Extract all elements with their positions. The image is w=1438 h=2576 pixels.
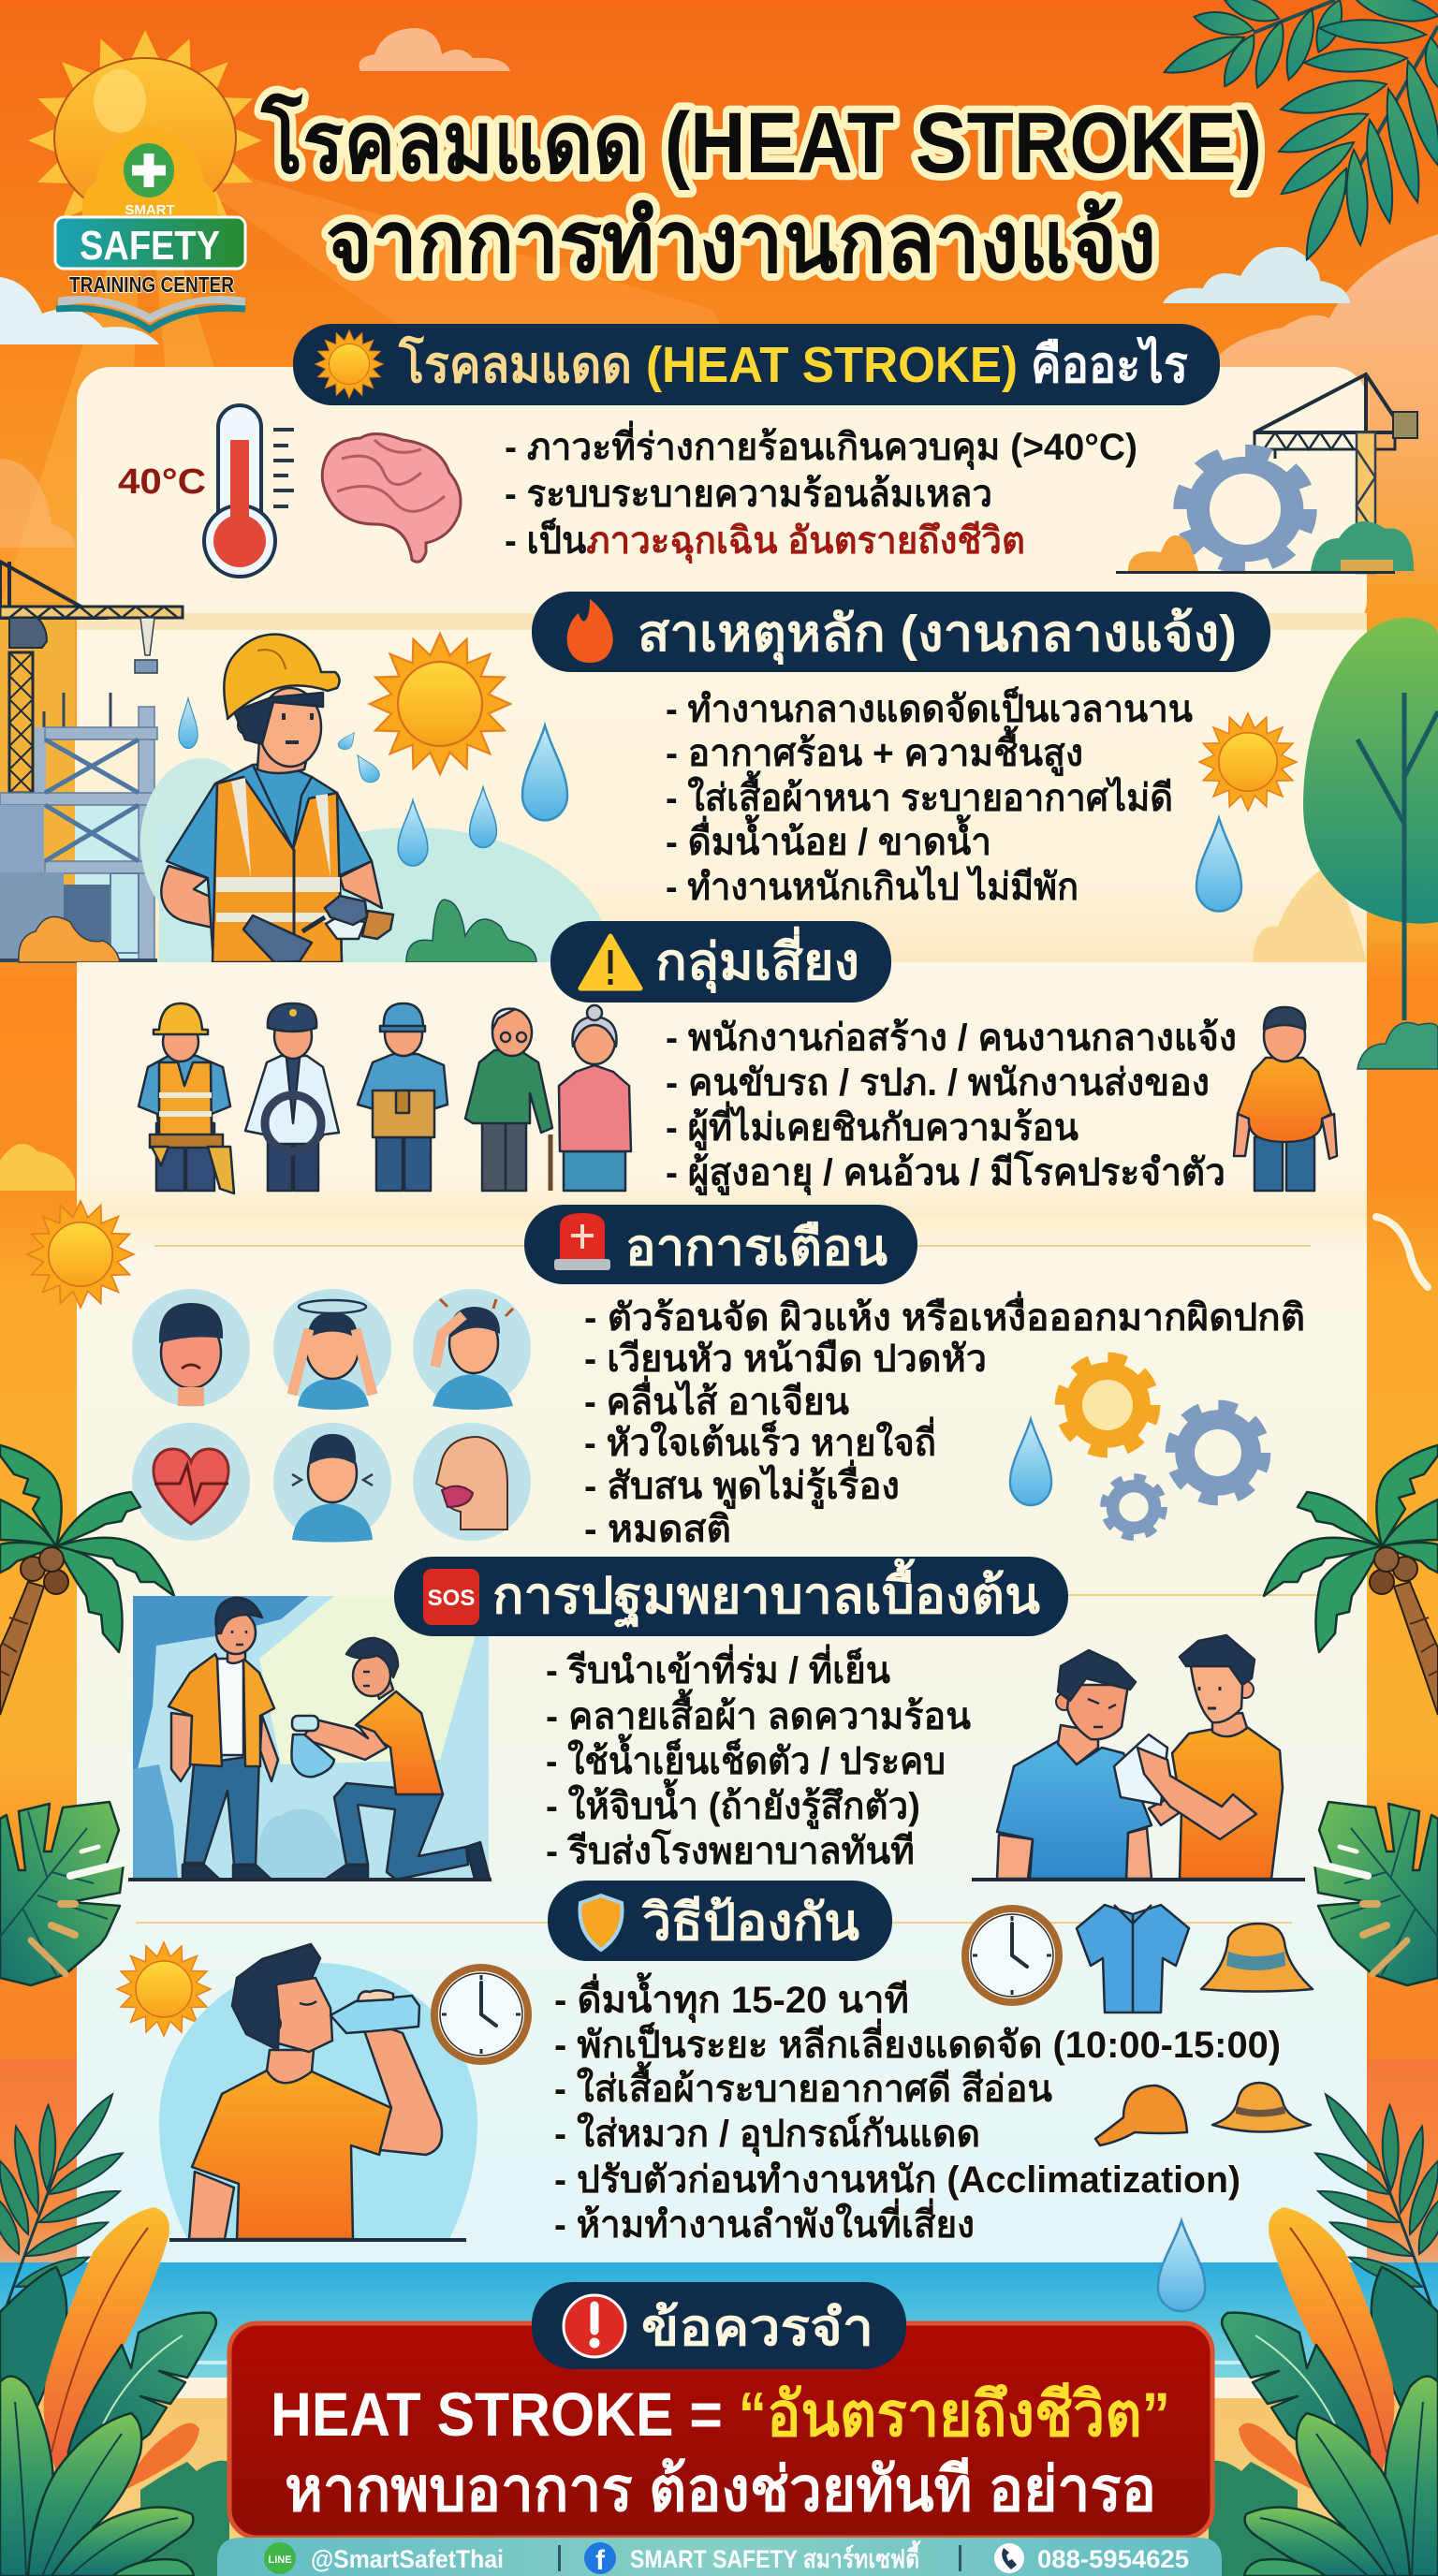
text: warning signs [584, 1291, 1305, 1550]
text: main causes: - ดื่มน้ำน้อย / ขาดน้ำ [666, 814, 991, 863]
icon: sun beside worker [370, 634, 510, 774]
text: callout: HEAT STROKE = “อันตรายถึงชีวิต” [271, 2379, 1170, 2449]
heading: first aid [394, 1557, 1068, 1636]
heading: prevention: วิธีป้องกัน [641, 1895, 859, 1951]
heading: remember: ข้อควรจำ [641, 2300, 873, 2356]
text: prevention: - ดื่มน้ำทุก 15-20 นาที [554, 1972, 909, 2024]
text: risk groups [666, 1017, 1237, 1196]
icon: line: LINE [268, 2554, 292, 2566]
person: orange shirt man [1172, 1727, 1283, 1879]
thermometer icon with 40 degrees [118, 405, 294, 577]
icon: sun right [1199, 713, 1297, 811]
icon: clock beside man [434, 1968, 528, 2061]
logo [28, 30, 262, 329]
title [260, 93, 1262, 290]
icon: brain [322, 433, 461, 562]
text: first aid: - คลายเสื้อผ้า ลดความร้อน [546, 1689, 971, 1737]
text: main causes: - อากาศร้อน + ความชื้นสูง [666, 725, 1083, 776]
text: main causes [666, 685, 1193, 908]
heading: remember [532, 2282, 906, 2369]
text: main causes: - ทำงานหนักเกินไป ไม่มีพัก [666, 865, 1078, 908]
text: callout: หากพบอาการ ต้องช่วยทันที อย่ารอ [285, 2454, 1156, 2524]
icon: sun hat large [1201, 1924, 1313, 1992]
icon: green bush [406, 900, 536, 962]
text: risk groups: - พนักงานก่อสร้าง / คนงานกลางแจ้ง [666, 1017, 1237, 1059]
heading: risk groups [550, 921, 891, 1003]
splash decoration right [1376, 1217, 1428, 1287]
palm branch: top right [1160, 0, 1438, 264]
text: first aid: - รีบนำเข้าที่ร่ม / ที่เย็น [546, 1644, 890, 1691]
text: prevention: - ใส่หมวก / อุปกรณ์กันแดด [554, 2112, 980, 2158]
text: first aid: - รีบส่งโรงพยาบาลทันที [546, 1829, 915, 1872]
panel: first aid [77, 1595, 1367, 1885]
first aid scene: right [972, 1635, 1305, 1881]
heading: what is heat stroke: (HEAT STROKE) [646, 337, 1018, 393]
icons: symptom circles [132, 1289, 531, 1543]
symptom: hot face [132, 1289, 250, 1407]
icon: sun prevention [117, 1942, 211, 2036]
icon: flame [567, 599, 613, 663]
panel: risk groups [77, 962, 1367, 1220]
tree right [1253, 618, 1438, 1020]
text: warning signs: - หัวใจเต้นเร็ว หายใจถี่ [584, 1416, 936, 1464]
icon: warning triangle [580, 936, 640, 988]
icon: drop large [1158, 2220, 1205, 2311]
icon: shield [580, 1895, 623, 1950]
icons: gears and drop [1010, 1360, 1263, 1536]
heading: risk groups: กลุ่มเสี่ยง [655, 926, 859, 994]
title: จากการทำงานกลางแจ้ง [326, 195, 1156, 290]
symptom: fast breathing [273, 1423, 391, 1543]
icon: sos: SOS [428, 1586, 475, 1611]
panel: main causes [77, 630, 1367, 964]
palm tree: right [1264, 1445, 1438, 1715]
cloud: right [1163, 247, 1350, 303]
worker illustration [161, 635, 393, 962]
person: standing man [171, 1713, 278, 1781]
logo: SMART [125, 202, 175, 218]
person: construction worker [139, 1003, 234, 1193]
icon: sun [315, 330, 383, 398]
text: warning signs: - หมดสติ [584, 1509, 731, 1550]
text: what is heat stroke: - ภาวะที่ร่างกายร้อนเกินควบคุม (>40°C) [505, 420, 1137, 471]
text: callout [271, 2379, 1170, 2524]
icon: sun left [27, 1201, 134, 1308]
band between panels [77, 613, 1367, 630]
person: overweight man [1234, 1007, 1337, 1191]
crane and gear: top right [1116, 374, 1417, 574]
text: prevention: - ปรับตัวก่อนทำงานหนัก (Acclimatization) [554, 2159, 1240, 2201]
cloud: top centre [359, 28, 510, 71]
heading: what is heat stroke: โรคลมแดด [398, 335, 632, 393]
text: risk groups: - ผู้ที่ไม่เคยชินกับความร้อน [666, 1101, 1078, 1150]
title: โรคลมแดด (HEAT STROKE) [260, 93, 1262, 191]
icon: cap [1095, 2086, 1187, 2145]
monstera leaf: left [0, 1802, 124, 1985]
text: warning signs: - เวียนหัว หน้ามืด ปวดหัว [584, 1339, 987, 1380]
heading: first aid: การปฐมพยาบาลเบื้องต้น [492, 1559, 1040, 1629]
text: first aid [546, 1644, 971, 1872]
icon: line [264, 2542, 296, 2574]
text: prevention [554, 1972, 1281, 2246]
icon: sos [423, 1569, 479, 1625]
heading: main causes [532, 592, 1270, 672]
foliage: bottom left [0, 2089, 229, 2576]
icon: clock top right [965, 1909, 1059, 2002]
callout: remember [229, 2323, 1212, 2538]
logo: SAFETY [80, 223, 220, 269]
thermometer icon with 40 degrees: 40°C [118, 462, 206, 502]
text: what is heat stroke: - ระบบระบายความร้อนล้มเหลว [505, 474, 992, 515]
icon: facebook: f [595, 2545, 606, 2576]
crane and scaffold: left [0, 562, 183, 962]
person: delivery worker [358, 1003, 448, 1191]
text: risk groups: - ผู้สูงอายุ / คนอ้วน / มีโรคประจำตัว [666, 1150, 1225, 1196]
first aid scene: left [128, 1596, 492, 1881]
drinking man illustration [159, 1944, 477, 2242]
text: risk groups: - คนขับรถ / รปภ. / พนักงานส่งของ [666, 1062, 1210, 1104]
text: prevention: - ห้ามทำงานลำพังในที่เสี่ยง [554, 2198, 975, 2246]
text: warning signs: - สับสน พูดไม่รู้เรื่อง [584, 1459, 900, 1509]
footer bar: 088-5954625 [1037, 2545, 1189, 2573]
icon: orange bush [19, 916, 120, 962]
person: kneeling helper [334, 1783, 468, 1880]
people: risk groups [139, 1003, 1337, 1193]
symptom: vomiting [413, 1423, 531, 1541]
text: warning signs: - คลื่นไส้ อาเจียน [584, 1375, 849, 1423]
icon: bucket hat [1212, 2083, 1311, 2132]
panel: what is heat stroke [77, 367, 1367, 634]
foliage: bottom right [1209, 2089, 1438, 2576]
person: elderly woman [559, 1005, 631, 1191]
icon: drop right [1196, 818, 1241, 911]
icon: small bush right [1357, 1022, 1438, 1069]
heading: warning signs: อาการเตือน [625, 1220, 888, 1276]
text: first aid: - ใช้น้ำเย็นเช็ดตัว / ประคบ [546, 1734, 946, 1782]
heading: what is heat stroke [293, 324, 1220, 405]
divider: first aid [1067, 1594, 1339, 1596]
panel: warning signs [77, 1217, 1367, 1601]
icon: phone [994, 2543, 1024, 2573]
footer bar [217, 2538, 1222, 2576]
heading: what is heat stroke: คืออะไร [1031, 335, 1188, 393]
icon: shirt [1077, 1905, 1189, 2012]
hills behind worker [140, 758, 612, 1101]
footer bar: SMART SAFETY สมาร์ทเซฟตี้ [630, 2539, 921, 2573]
text: what is heat stroke: - เป็นภาวะฉุกเฉิน อันตรายถึงชีวิต [505, 517, 1025, 564]
text: main causes: - ทำงานกลางแดดจัดเป็นเวลานาน [666, 685, 1193, 730]
monstera leaf: right [1314, 1802, 1438, 1985]
symptom: dizzy [273, 1289, 391, 1410]
cloud: left [0, 277, 159, 344]
symptom: heart [132, 1423, 250, 1541]
symptom: headache [413, 1289, 531, 1410]
text: warning signs: - ตัวร้อนจัด ผิวแห้ง หรือเหงื่อออกมากผิดปกติ [584, 1291, 1305, 1339]
person: elderly man [465, 1009, 552, 1191]
heading: warning signs [524, 1205, 917, 1284]
text: prevention: - พักเป็นระยะ หลีกเลี่ยงแดดจัด (10:00-15:00) [554, 2018, 1281, 2066]
icon: facebook [584, 2542, 616, 2576]
icon: alarm light [554, 1213, 610, 1270]
text: what is heat stroke [505, 420, 1137, 564]
person: driver [245, 1003, 339, 1191]
footer bar: @SmartSafetThai [311, 2545, 504, 2573]
divider: prevention [136, 1922, 1292, 1924]
text: prevention: - ใส่เสื้อผ้าระบายอากาศดี สีอ่อน [554, 2061, 1052, 2110]
palm tree: left [0, 1445, 174, 1715]
icons: sweat drops [179, 698, 567, 866]
divider: warning [154, 1245, 1311, 1247]
panel: prevention [77, 1883, 1367, 2262]
heading: main causes: สาเหตุหลัก (งานกลางแจ้ง) [638, 606, 1237, 666]
text: main causes: - ใส่เสื้อผ้าหนา ระบายอากาศไม่ดี [666, 770, 1173, 819]
person: blue shirt man [997, 1828, 1152, 1879]
text: first aid: - ให้จิบน้ำ (ถ้ายังรู้สึกตัว) [546, 1778, 920, 1829]
heading: prevention [548, 1881, 892, 1961]
icon: exclamation [564, 2295, 625, 2357]
logo: TRAINING CENTER [69, 272, 234, 297]
